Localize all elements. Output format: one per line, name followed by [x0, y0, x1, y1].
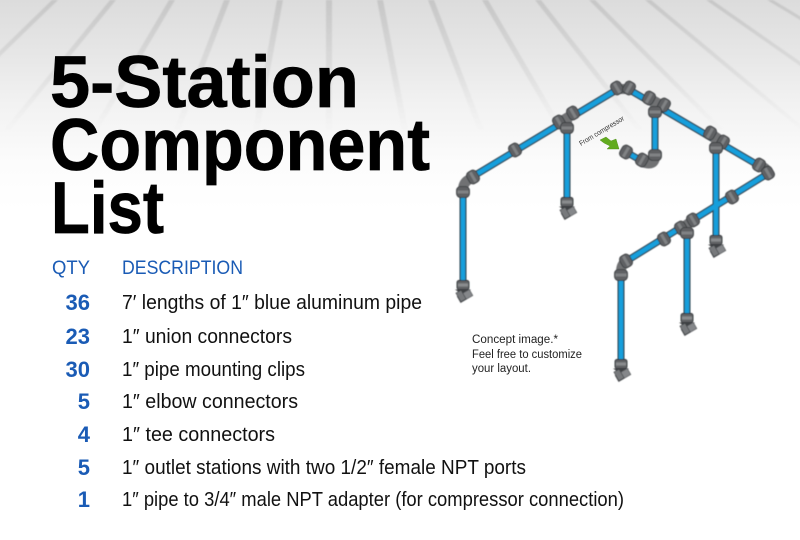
description column: 1″ union connectors — [122, 326, 292, 348]
quantity column: 30 — [66, 357, 90, 382]
table header — [52, 258, 243, 279]
quantity column: 36 — [66, 290, 90, 315]
description column: 7′ lengths of 1″ blue aluminum pipe — [122, 292, 422, 314]
title: Component — [50, 105, 430, 186]
connectors — [456, 80, 776, 280]
description column: 1″ outlet stations with two 1/2″ female NPT ports — [122, 457, 526, 479]
pipework — [455, 80, 776, 382]
quantity column: 23 — [66, 324, 90, 349]
table header: DESCRIPTION — [122, 258, 243, 279]
pipes outline — [463, 89, 768, 364]
concept note: Concept image.* — [472, 334, 559, 346]
description column: 1″ pipe mounting clips — [122, 359, 305, 381]
background gradient — [0, 0, 800, 210]
description column: 1″ elbow connectors — [122, 391, 298, 413]
title: 5-Station — [50, 42, 359, 123]
description column: 1″ pipe to 3/4″ male NPT adapter (for compressor connection) — [122, 489, 624, 511]
quantity column — [66, 290, 91, 512]
description column: 1″ tee connectors — [122, 424, 275, 446]
arrow: from compressor — [600, 137, 619, 149]
label: from compressor: From compressor — [577, 113, 626, 148]
table header: QTY — [52, 258, 90, 279]
concept note: your layout. — [472, 363, 531, 375]
pipe diagram — [455, 80, 776, 382]
quantity column: 5 — [78, 389, 90, 414]
quantity column: 1 — [78, 487, 90, 512]
concept note: Feel free to customize — [472, 349, 582, 361]
elbows and tee bodies — [463, 89, 767, 272]
pipes fill — [463, 89, 768, 364]
title — [50, 42, 430, 249]
concept note — [472, 334, 582, 375]
description column — [122, 292, 624, 511]
outlet stations — [455, 198, 726, 382]
title: List — [51, 168, 164, 249]
background rays — [0, 0, 800, 130]
quantity column: 4 — [78, 422, 91, 447]
quantity column: 5 — [78, 455, 90, 480]
